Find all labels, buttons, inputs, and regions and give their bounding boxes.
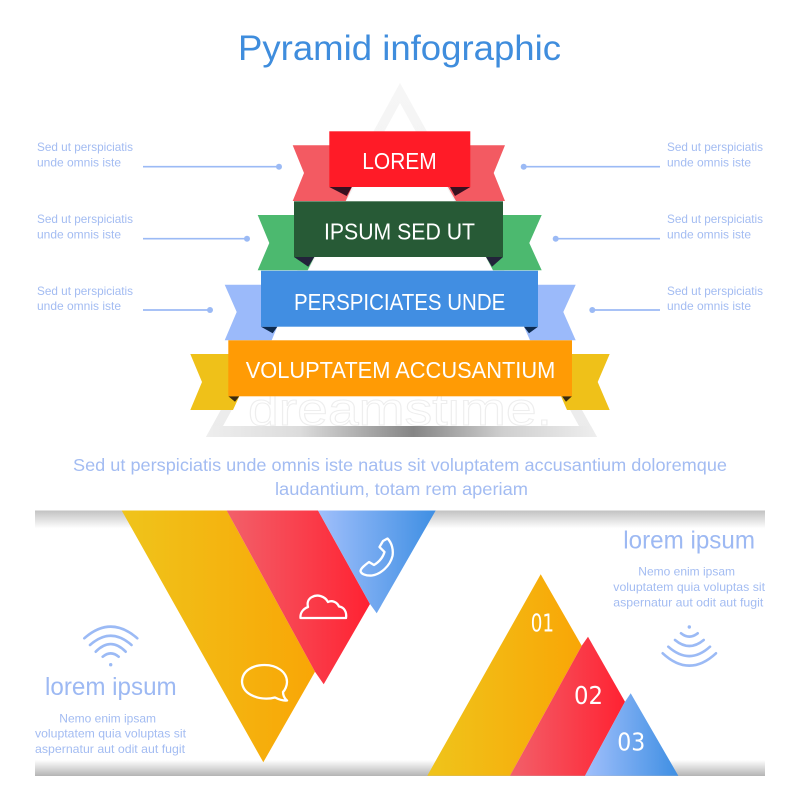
segment: 01: 01: [531, 609, 554, 638]
label left 1: Sed ut perspiciatis: [37, 140, 133, 154]
left text block: [35, 673, 187, 756]
segment: 01: [427, 574, 582, 776]
ribbon: voluptatem accusantium: [190, 340, 610, 410]
ribbon: ipsum sed ut: [258, 201, 542, 270]
label left 2: [37, 212, 250, 242]
label right 1: Sed ut perspiciatis: [667, 140, 763, 154]
segment: 03: 03: [617, 728, 645, 757]
paragraph: Sed ut perspiciatis unde omnis iste natus sit voluptatem accusantium doloremque: [73, 455, 727, 475]
right wifi icon: [663, 626, 716, 666]
icon: cloud: [300, 596, 346, 618]
inverted pyramid: [122, 510, 436, 762]
segment: 02: [510, 637, 625, 776]
right text block: [613, 526, 766, 610]
left text block: lorem ipsum: [45, 673, 177, 701]
right text block: aspernatur aut odit aut fugit: [613, 596, 764, 610]
icon: speech bubble: [242, 665, 287, 701]
background triangle: [206, 83, 597, 437]
paragraph: [73, 455, 727, 499]
segment: 02: 02: [574, 681, 603, 710]
numbered pyramid: [427, 574, 678, 776]
left text block: Nemo enim ipsam: [59, 711, 156, 725]
right text block: Nemo enim ipsam: [638, 565, 735, 579]
label right 2: Sed ut perspiciatis: [667, 212, 763, 226]
label right 1: unde omnis iste: [667, 156, 751, 170]
right text block: voluptatem quia voluptas sit: [613, 580, 766, 594]
label right 1: [521, 140, 763, 170]
left text block: voluptatem quia voluptas sit: [35, 727, 187, 741]
segment: blue: [318, 510, 436, 613]
title: Pyramid infographic: [238, 29, 561, 68]
label right 2: unde omnis iste: [667, 228, 751, 242]
label left 2: unde omnis iste: [37, 228, 121, 242]
segment: yellow: [122, 510, 315, 762]
label right 3: unde omnis iste: [667, 299, 751, 313]
bottom panel bands: [35, 510, 765, 776]
paragraph: laudantium, totam rem aperiam: [275, 479, 528, 499]
ribbon: lorem: LOREM: [362, 148, 437, 174]
label left 2: Sed ut perspiciatis: [37, 212, 133, 226]
label right 3: Sed ut perspiciatis: [667, 284, 763, 298]
ribbon: lorem: [293, 131, 505, 201]
right text block: lorem ipsum: [623, 526, 755, 554]
left text block: aspernatur aut odit aut fugit: [35, 742, 186, 756]
label left 3: [37, 284, 213, 313]
watermark: dreamstime.: [248, 383, 552, 435]
label left 1: unde omnis iste: [37, 156, 121, 170]
ribbon: perspiciates unde: PERSPICIATES UNDE: [294, 289, 505, 315]
label right 2: [553, 212, 763, 242]
label right 3: [589, 284, 763, 313]
label left 3: Sed ut perspiciatis: [37, 284, 133, 298]
label left 3: unde omnis iste: [37, 299, 121, 313]
label left 1: [37, 140, 282, 170]
icon: phone: [360, 538, 393, 576]
ribbon: perspiciates unde: [225, 271, 576, 340]
segment: red: [227, 510, 370, 684]
left wifi icon: [84, 627, 137, 666]
ribbon: ipsum sed ut: IPSUM SED UT: [324, 219, 475, 245]
ribbon: voluptatem accusantium: VOLUPTATEM ACCUSANTIUM: [246, 357, 555, 383]
segment: 03: [585, 693, 678, 776]
